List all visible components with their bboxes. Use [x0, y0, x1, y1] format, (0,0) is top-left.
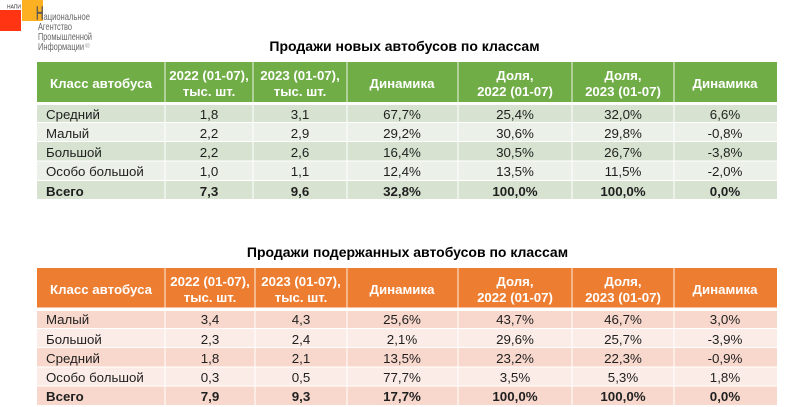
row: Всего: 9,3: [292, 389, 310, 404]
row: Средний: 3,1: [291, 107, 309, 122]
row: Малый: Малый: [46, 312, 89, 327]
row: Средний: -0,9%: [708, 351, 743, 366]
row: Всего: 17,7%: [383, 389, 421, 404]
row: Средний: 23,2%: [496, 351, 534, 366]
table header: used buses: 2022 (01-07): [477, 290, 553, 305]
row: Малый: 43,7%: [496, 312, 534, 327]
row: Большой: -3,9%: [708, 332, 743, 347]
row: Всего: 7,3: [200, 184, 218, 199]
row: Средний: 25,4%: [496, 107, 534, 122]
row: Особо большой: [37, 162, 777, 180]
row: Особо большой: 3,5%: [500, 370, 530, 385]
row: Средний: 13,5%: [383, 351, 421, 366]
row: Особо большой: 11,5%: [605, 164, 642, 179]
row: Большой: 2,1%: [387, 332, 417, 347]
row: Всего: 100,0%: [492, 184, 538, 199]
row: Большой: 25,7%: [604, 332, 642, 347]
row: Большой: 29,6%: [496, 332, 534, 347]
row: Особо большой: 13,5%: [496, 164, 534, 179]
row: Большой: 30,5%: [496, 145, 534, 160]
logo: НАПИ: ®: [85, 42, 90, 50]
row: Средний: Средний: [46, 107, 100, 122]
table: used bus sales: [37, 268, 777, 405]
table header: used buses: 2022 (01-07),: [170, 274, 250, 289]
table header: new buses: Класс автобуса: [50, 76, 153, 91]
row: Средний: 1,8: [201, 351, 219, 366]
row: Всего: 0,0%: [710, 184, 740, 199]
table header: new buses: 2023 (01-07),: [260, 68, 340, 83]
table header: used buses: Динамика: [693, 282, 758, 297]
title: new buses: Продажи новых автобусов по классам: [269, 38, 540, 54]
logo: НАПИ: [0, 0, 92, 53]
table header: used buses: Класс автобуса: [50, 282, 153, 297]
table header: new buses: [37, 62, 777, 102]
table header: new buses: 2023 (01-07): [585, 84, 661, 99]
table: new bus sales: [37, 62, 777, 199]
row: Особо большой: 0,3: [201, 370, 219, 385]
table header: used buses: тыс. шт.: [275, 290, 327, 305]
row: Всего: 7,9: [201, 389, 219, 404]
row: Средний: 6,6%: [710, 107, 740, 122]
row: Средний: 32,0%: [604, 107, 642, 122]
row: Малый: 3,0%: [710, 312, 740, 327]
row: Особо большой: Особо большой: [46, 370, 144, 385]
row: Особо большой: 1,1: [291, 164, 309, 179]
row: Малый: 2,9: [291, 126, 309, 141]
row: Всего: [37, 386, 777, 405]
row: Всего: [37, 181, 777, 199]
table header: used buses: Динамика: [370, 282, 435, 297]
table header: used buses: Доля,: [604, 274, 642, 289]
row: Малый: 3,4: [201, 312, 220, 327]
table header: used buses: [37, 268, 777, 308]
table header: new buses: Динамика: [693, 76, 758, 91]
row: Большой: -3,8%: [708, 145, 743, 160]
row: Всего: Всего: [46, 389, 84, 404]
table header: used buses: тыс. шт.: [184, 290, 236, 305]
row: Малый: [37, 123, 777, 141]
row: Особо большой: 1,8%: [710, 370, 740, 385]
row: Средний: 67,7%: [383, 107, 421, 122]
row: Особо большой: Особо большой: [46, 164, 144, 179]
row: Большой: [37, 142, 777, 160]
table header: new buses: Доля,: [496, 68, 534, 83]
row: Большой: 2,6: [291, 145, 309, 160]
table header: new buses: тыс. шт.: [183, 84, 235, 99]
row: Большой: 2,2: [200, 145, 218, 160]
table header: new buses: Динамика: [370, 76, 435, 91]
logo: НАПИ: ациональное: [44, 11, 90, 23]
row: Средний: 1,8: [200, 107, 218, 122]
row: Особо большой: 5,3%: [608, 370, 638, 385]
logo: НАПИ: Промышленной: [38, 31, 92, 43]
row: Особо большой: 12,4%: [383, 164, 421, 179]
row: Всего: 100,0%: [600, 389, 646, 404]
row: Большой: 16,4%: [383, 145, 421, 160]
table header: used buses: Доля,: [496, 274, 534, 289]
table header: used buses: 2023 (01-07),: [261, 274, 341, 289]
row: Малый: 29,8%: [604, 126, 642, 141]
table header: new buses: 2022 (01-07): [477, 84, 553, 99]
row: Средний: [37, 105, 777, 122]
row: Малый: 25,6%: [383, 312, 421, 327]
row: Всего: 32,8%: [383, 184, 421, 199]
row: Большой: 2,4: [292, 332, 311, 347]
row: Средний: Средний: [46, 351, 100, 366]
row: Большой: Большой: [46, 145, 102, 160]
title: used buses: Продажи подержанных автобусов по классам: [247, 244, 568, 260]
table header: new buses: тыс. шт.: [274, 84, 326, 99]
logo: НАПИ: Н: [36, 4, 44, 24]
row: Средний: 2,1: [292, 351, 310, 366]
row: Большой: Большой: [46, 332, 102, 347]
table header: new buses: Доля,: [604, 68, 642, 83]
row: Особо большой: 1,0: [200, 164, 218, 179]
row: Малый: -0,8%: [708, 126, 743, 141]
row: Средний: 22,3%: [604, 351, 642, 366]
row: Особо большой: 77,7%: [383, 370, 421, 385]
row: Особо большой: [37, 368, 777, 386]
row: Малый: Малый: [46, 126, 89, 141]
row: Всего: 100,0%: [600, 184, 646, 199]
row: Большой: [37, 329, 777, 347]
row: Средний: [37, 348, 777, 366]
row: Всего: Всего: [46, 184, 84, 199]
row: Всего: 0,0%: [710, 389, 740, 404]
logo: НАПИ: НАПИ: [7, 4, 21, 10]
row: Особо большой: -2,0%: [708, 164, 743, 179]
row: Всего: 9,6: [291, 184, 309, 199]
row: Малый: 29,2%: [383, 126, 421, 141]
row: Малый: 46,7%: [604, 312, 642, 327]
table header: used buses: 2023 (01-07): [585, 290, 661, 305]
row: Малый: 2,2: [200, 126, 218, 141]
row: Особо большой: 0,5: [292, 370, 310, 385]
row: Малый: 4,3: [292, 312, 310, 327]
row: Большой: 26,7%: [604, 145, 642, 160]
row: Малый: 30,6%: [496, 126, 534, 141]
row: Большой: 2,3: [201, 332, 219, 347]
logo: НАПИ: Агентство: [38, 21, 72, 33]
logo: НАПИ: Информации: [38, 41, 84, 53]
row: Всего: 100,0%: [492, 389, 538, 404]
row: Малый: [37, 311, 777, 328]
table header: new buses: 2022 (01-07),: [169, 68, 249, 83]
